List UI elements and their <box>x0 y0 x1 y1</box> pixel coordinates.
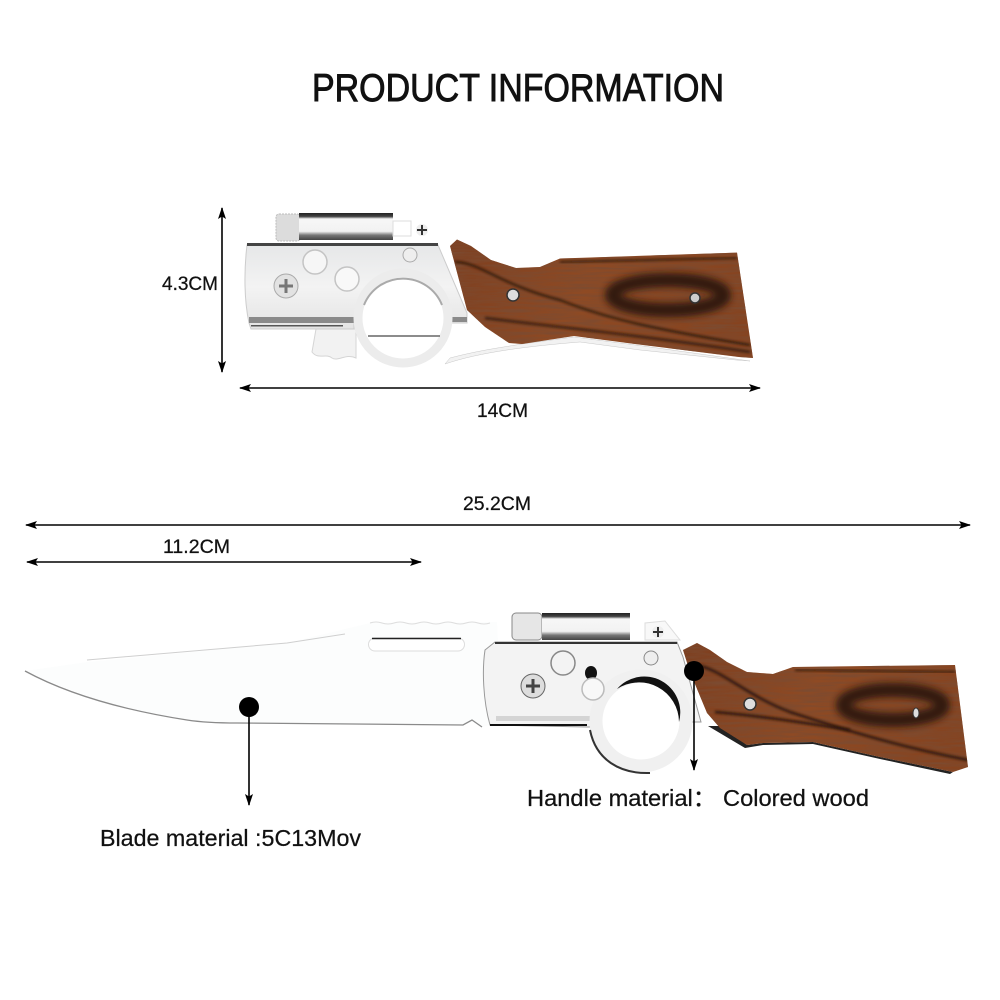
ring <box>590 676 686 773</box>
flashlight <box>276 213 428 241</box>
wood handle <box>450 240 753 358</box>
buttons and screws <box>274 248 417 298</box>
length dimension: open: 25.2CM <box>463 494 531 515</box>
callout: blade material: Blade material :5C13Mov <box>100 825 362 851</box>
metal frame <box>483 642 701 727</box>
callout: handle material: Handle material： Colored wood <box>527 785 869 811</box>
folded blade tail <box>445 337 750 364</box>
blade <box>25 622 498 727</box>
flashlight <box>512 613 680 640</box>
ring <box>358 273 448 363</box>
length dimension: folded: 14CM <box>477 401 528 422</box>
serrated tang <box>312 329 356 359</box>
height dimension: 4.3CM <box>162 274 218 295</box>
shadow under handle <box>708 726 953 774</box>
knife: folded view <box>245 213 760 365</box>
handle screws <box>744 698 919 718</box>
callout: blade material <box>100 697 362 851</box>
handle screws <box>507 289 700 303</box>
callout: handle material <box>527 661 869 811</box>
knife: open view <box>25 613 975 775</box>
metal frame <box>245 245 467 329</box>
blade length dimension: 11.2CM <box>163 537 230 558</box>
buttons and screws <box>521 651 658 700</box>
title: PRODUCT INFORMATION <box>312 67 724 110</box>
wood handle <box>680 640 975 775</box>
